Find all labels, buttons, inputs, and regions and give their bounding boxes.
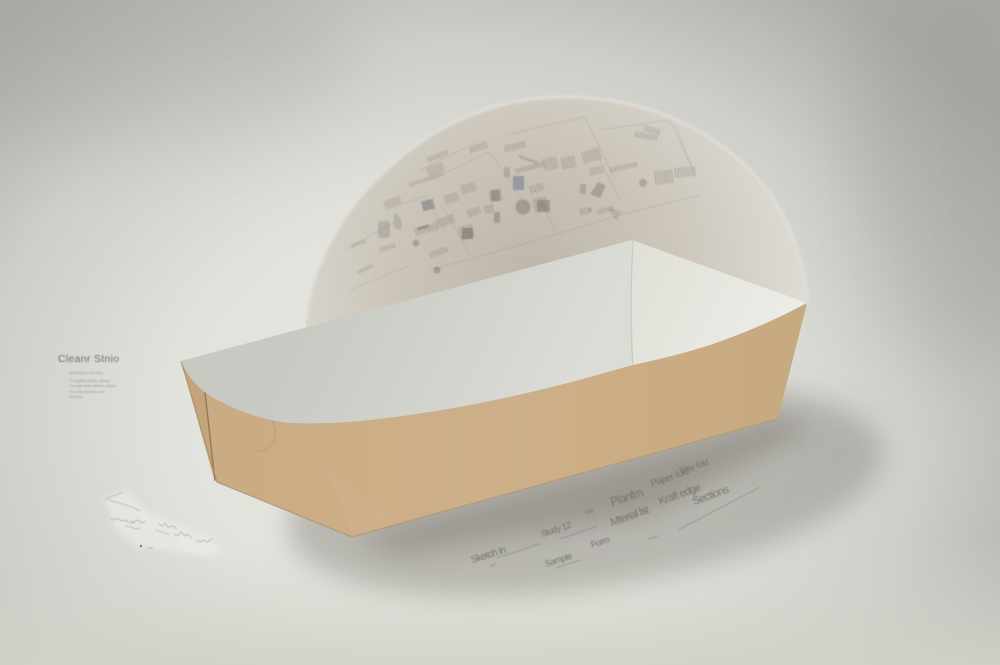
sketch underlines	[490, 487, 760, 568]
darker sketch marks	[378, 155, 647, 274]
hatched drawing clusters	[352, 128, 695, 272]
brand description lines	[69, 371, 116, 399]
tray left end flap	[181, 361, 215, 482]
kraft paper tray	[181, 240, 807, 537]
fine ruled panel lines	[345, 117, 700, 290]
brand description lines: For every function and	[69, 390, 105, 394]
dome with sketch illustrations	[306, 97, 808, 330]
brand name: Cleanr Stnio	[58, 353, 119, 365]
brand description lines: Thoughtful design, always	[69, 379, 111, 383]
handwriting	[105, 492, 212, 542]
tray fold facet	[328, 470, 395, 535]
handwritten note card, lower left: note	[147, 545, 154, 550]
brand description lines: intention	[69, 395, 83, 399]
tray outer kraft body	[181, 303, 807, 536]
sketch text clusters	[470, 457, 731, 569]
sketch text clusters: Study 12	[540, 520, 572, 539]
floor sketch annotations, lower right	[470, 457, 760, 569]
ground shadow under the tray	[218, 351, 896, 629]
sketch text clusters: Sections	[691, 483, 731, 508]
handwritten note card, lower left	[104, 490, 224, 557]
sketch text clusters: Hx	[584, 507, 595, 517]
sketch text clusters: Kraft edge	[657, 481, 703, 508]
sketch text clusters: Tray fold	[678, 457, 710, 476]
sketch text clusters: Paper fold	[649, 466, 690, 490]
brand description lines: Through what matters, simply	[69, 384, 116, 388]
sketch text clusters: Sample	[544, 551, 573, 569]
small bullet	[140, 545, 142, 547]
brand description lines: Introduction Services	[69, 371, 103, 375]
sketch text clusters: Planfm	[609, 485, 645, 509]
tray inner back wall	[181, 240, 633, 423]
sketch text clusters: Form	[590, 535, 611, 550]
tray inner right wall	[632, 240, 807, 365]
sketch marks on the dome	[345, 117, 700, 290]
sketch text clusters: Mterial lst	[609, 504, 651, 529]
sketch text clusters: Sketch ln	[470, 545, 507, 566]
brand text block	[58, 353, 119, 399]
